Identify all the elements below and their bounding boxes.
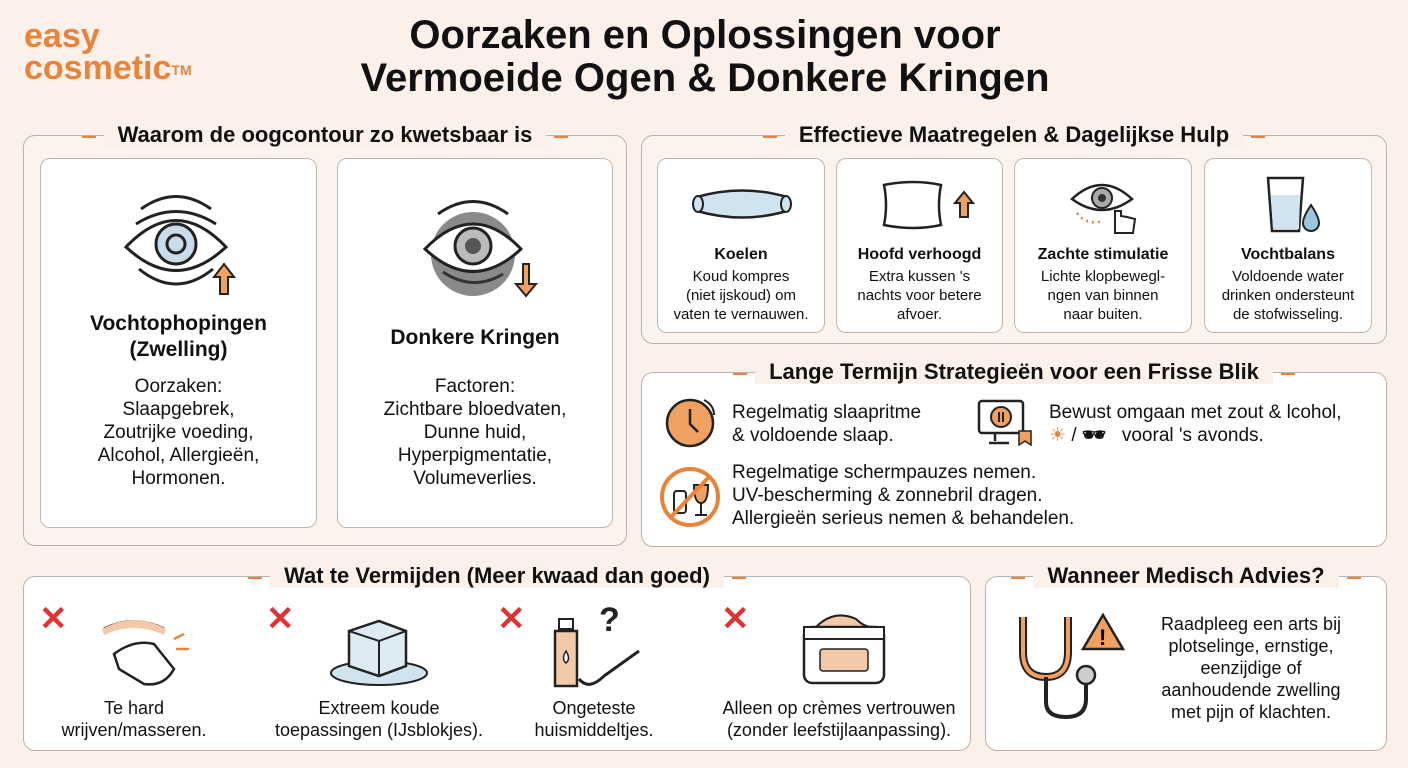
card: head raised <box>836 158 1003 333</box>
text: screen UV allergies <box>732 462 1074 529</box>
panel: measures <box>641 135 1387 344</box>
card: cooling: vaten te vernauwen. <box>673 306 809 323</box>
card: swelling: Vochtophopingen <box>90 312 267 335</box>
item: rubbing: Te hard <box>104 698 164 718</box>
icon: pillow <box>882 180 975 230</box>
item: home remedies: ✕ <box>497 600 526 638</box>
text: salt alcohol <box>1049 402 1342 446</box>
text: medical advice: eenzijdige of <box>1200 658 1302 678</box>
item: creams only: Alleen op crèmes vertrouwen <box>722 698 956 718</box>
card: hydration: drinken ondersteunt <box>1222 287 1354 304</box>
text: screen UV allergies: Regelmatige schermpauzes nemen. <box>732 462 1036 483</box>
title <box>360 13 1050 100</box>
icon: swollen eye <box>124 195 236 295</box>
card: cooling: (niet ijskoud) om <box>686 287 796 304</box>
item: home remedies <box>497 600 654 740</box>
card: head raised: afvoer. <box>897 306 942 323</box>
item: creams only: ✕ <box>721 600 750 638</box>
icon: clock <box>666 398 715 448</box>
text: screen UV allergies: UV-bescherming & zonnebril dragen. <box>732 485 1043 506</box>
text: sleep <box>732 402 921 446</box>
panel: long term <box>641 372 1387 547</box>
title: Vermoeide Ogen & Donkere Kringen <box>360 56 1050 100</box>
text: salt alcohol: ☀ / 🕶 vooral 's avonds. <box>1049 425 1264 446</box>
panel: why vulnerable <box>23 135 627 546</box>
card: head raised: Hoofd verhoogd <box>858 246 981 263</box>
item: creams only: (zonder leefstijlaanpassing). <box>727 720 951 740</box>
text: medical advice: met pijn of klachten. <box>1171 702 1331 722</box>
card: cooling: Koud kompres <box>693 268 789 285</box>
panel: medical advice <box>985 576 1387 751</box>
card: hydration: Vochtbalans <box>1241 246 1335 263</box>
card: dark circles: Donkere Kringen <box>390 326 560 349</box>
card: head raised: nachts voor betere <box>857 287 982 304</box>
icon: monitor <box>978 400 1032 446</box>
item: home remedies: ? <box>599 601 620 639</box>
icon: no salt wine <box>660 467 720 527</box>
icon: stethoscope <box>1019 612 1126 719</box>
heading: why: Waarom de oogcontour zo kwetsbaar is <box>118 122 532 147</box>
card: swelling <box>40 158 317 528</box>
card: swelling: Hormonen. <box>132 468 226 489</box>
panel: avoid <box>23 576 971 751</box>
card: dark circles: Hyperpigmentatie, <box>398 445 552 466</box>
text: medical advice: plotselinge, ernstige, <box>1168 636 1334 656</box>
card: dark circles: Volumeverlies. <box>413 468 537 489</box>
card: stimulation: ngen van binnen <box>1048 287 1158 304</box>
card: hydration <box>1204 158 1372 333</box>
card: hydration: Voldoende water <box>1232 268 1344 285</box>
icon: water glass <box>1266 176 1320 232</box>
card: stimulation: naar buiten. <box>1063 306 1143 323</box>
item: cold: ✕ <box>266 600 294 638</box>
card: hydration: de stofwisseling. <box>1233 306 1343 323</box>
card: stimulation <box>1014 158 1192 333</box>
card: head raised: Extra kussen 's <box>869 268 970 285</box>
text: sleep: Regelmatig slaapritme <box>732 402 921 423</box>
heading: medical: Wanneer Medisch Advies? <box>1047 563 1325 588</box>
item: home remedies: huismiddeltjes. <box>534 720 654 740</box>
card: stimulation: Zachte stimulatie <box>1038 246 1168 263</box>
card: swelling: Oorzaken: <box>135 376 222 397</box>
text: salt alcohol: Bewust omgaan met zout & lcohol, <box>1049 402 1342 423</box>
text: medical advice: Raadpleeg een arts bij <box>1161 614 1341 634</box>
card: dark circles: Factoren: <box>435 376 515 397</box>
item: creams only <box>721 600 956 740</box>
card: dark circles <box>337 158 613 528</box>
text: sleep: & voldoende slaap. <box>732 425 894 446</box>
card: dark circles: Dunne huid, <box>424 422 526 443</box>
logo: easy <box>24 17 100 55</box>
icon: eye mask <box>692 189 792 219</box>
card: swelling: Slaapgebrek, <box>123 399 234 420</box>
card: swelling: Zoutrijke voeding, <box>104 422 253 443</box>
logo: cosmeticTM <box>24 49 192 87</box>
item: cold: Extreem koude <box>318 698 440 718</box>
icon: dark circle eye <box>423 200 538 298</box>
text: screen UV allergies: Allergieën serieus nemen & behandelen. <box>732 508 1074 529</box>
logo <box>24 17 192 87</box>
item: rubbing: ✕ <box>39 600 68 638</box>
card: swelling: (Zwelling) <box>130 338 228 361</box>
card: stimulation: Lichte klopbewegl- <box>1041 268 1165 285</box>
heading: measures: Effectieve Maatregelen & Dagelijkse Hulp <box>799 122 1229 147</box>
heading: avoid: Wat te Vermijden (Meer kwaad dan goed) <box>284 563 710 588</box>
card: cooling <box>657 158 825 333</box>
item: home remedies: Ongeteste <box>552 698 636 718</box>
text: medical advice <box>1161 614 1341 722</box>
title: Oorzaken en Oplossingen voor <box>409 13 1001 57</box>
text: medical advice: aanhoudende zwelling <box>1161 680 1341 700</box>
heading: long term: Lange Termijn Strategieën voor een Frisse Blik <box>769 359 1259 384</box>
item: rubbing: wrijven/masseren. <box>61 720 207 740</box>
icon: stethoscope: ! <box>1099 625 1106 650</box>
item: rubbing <box>39 600 207 740</box>
item: cold: toepassingen (IJsblokjes). <box>275 720 483 740</box>
card: swelling: Alcohol, Allergieën, <box>98 445 259 466</box>
card: dark circles: Zichtbare bloedvaten, <box>384 399 566 420</box>
item: cold <box>266 600 483 740</box>
icon: eye with finger <box>1070 184 1136 234</box>
card: cooling: Koelen <box>714 246 768 263</box>
